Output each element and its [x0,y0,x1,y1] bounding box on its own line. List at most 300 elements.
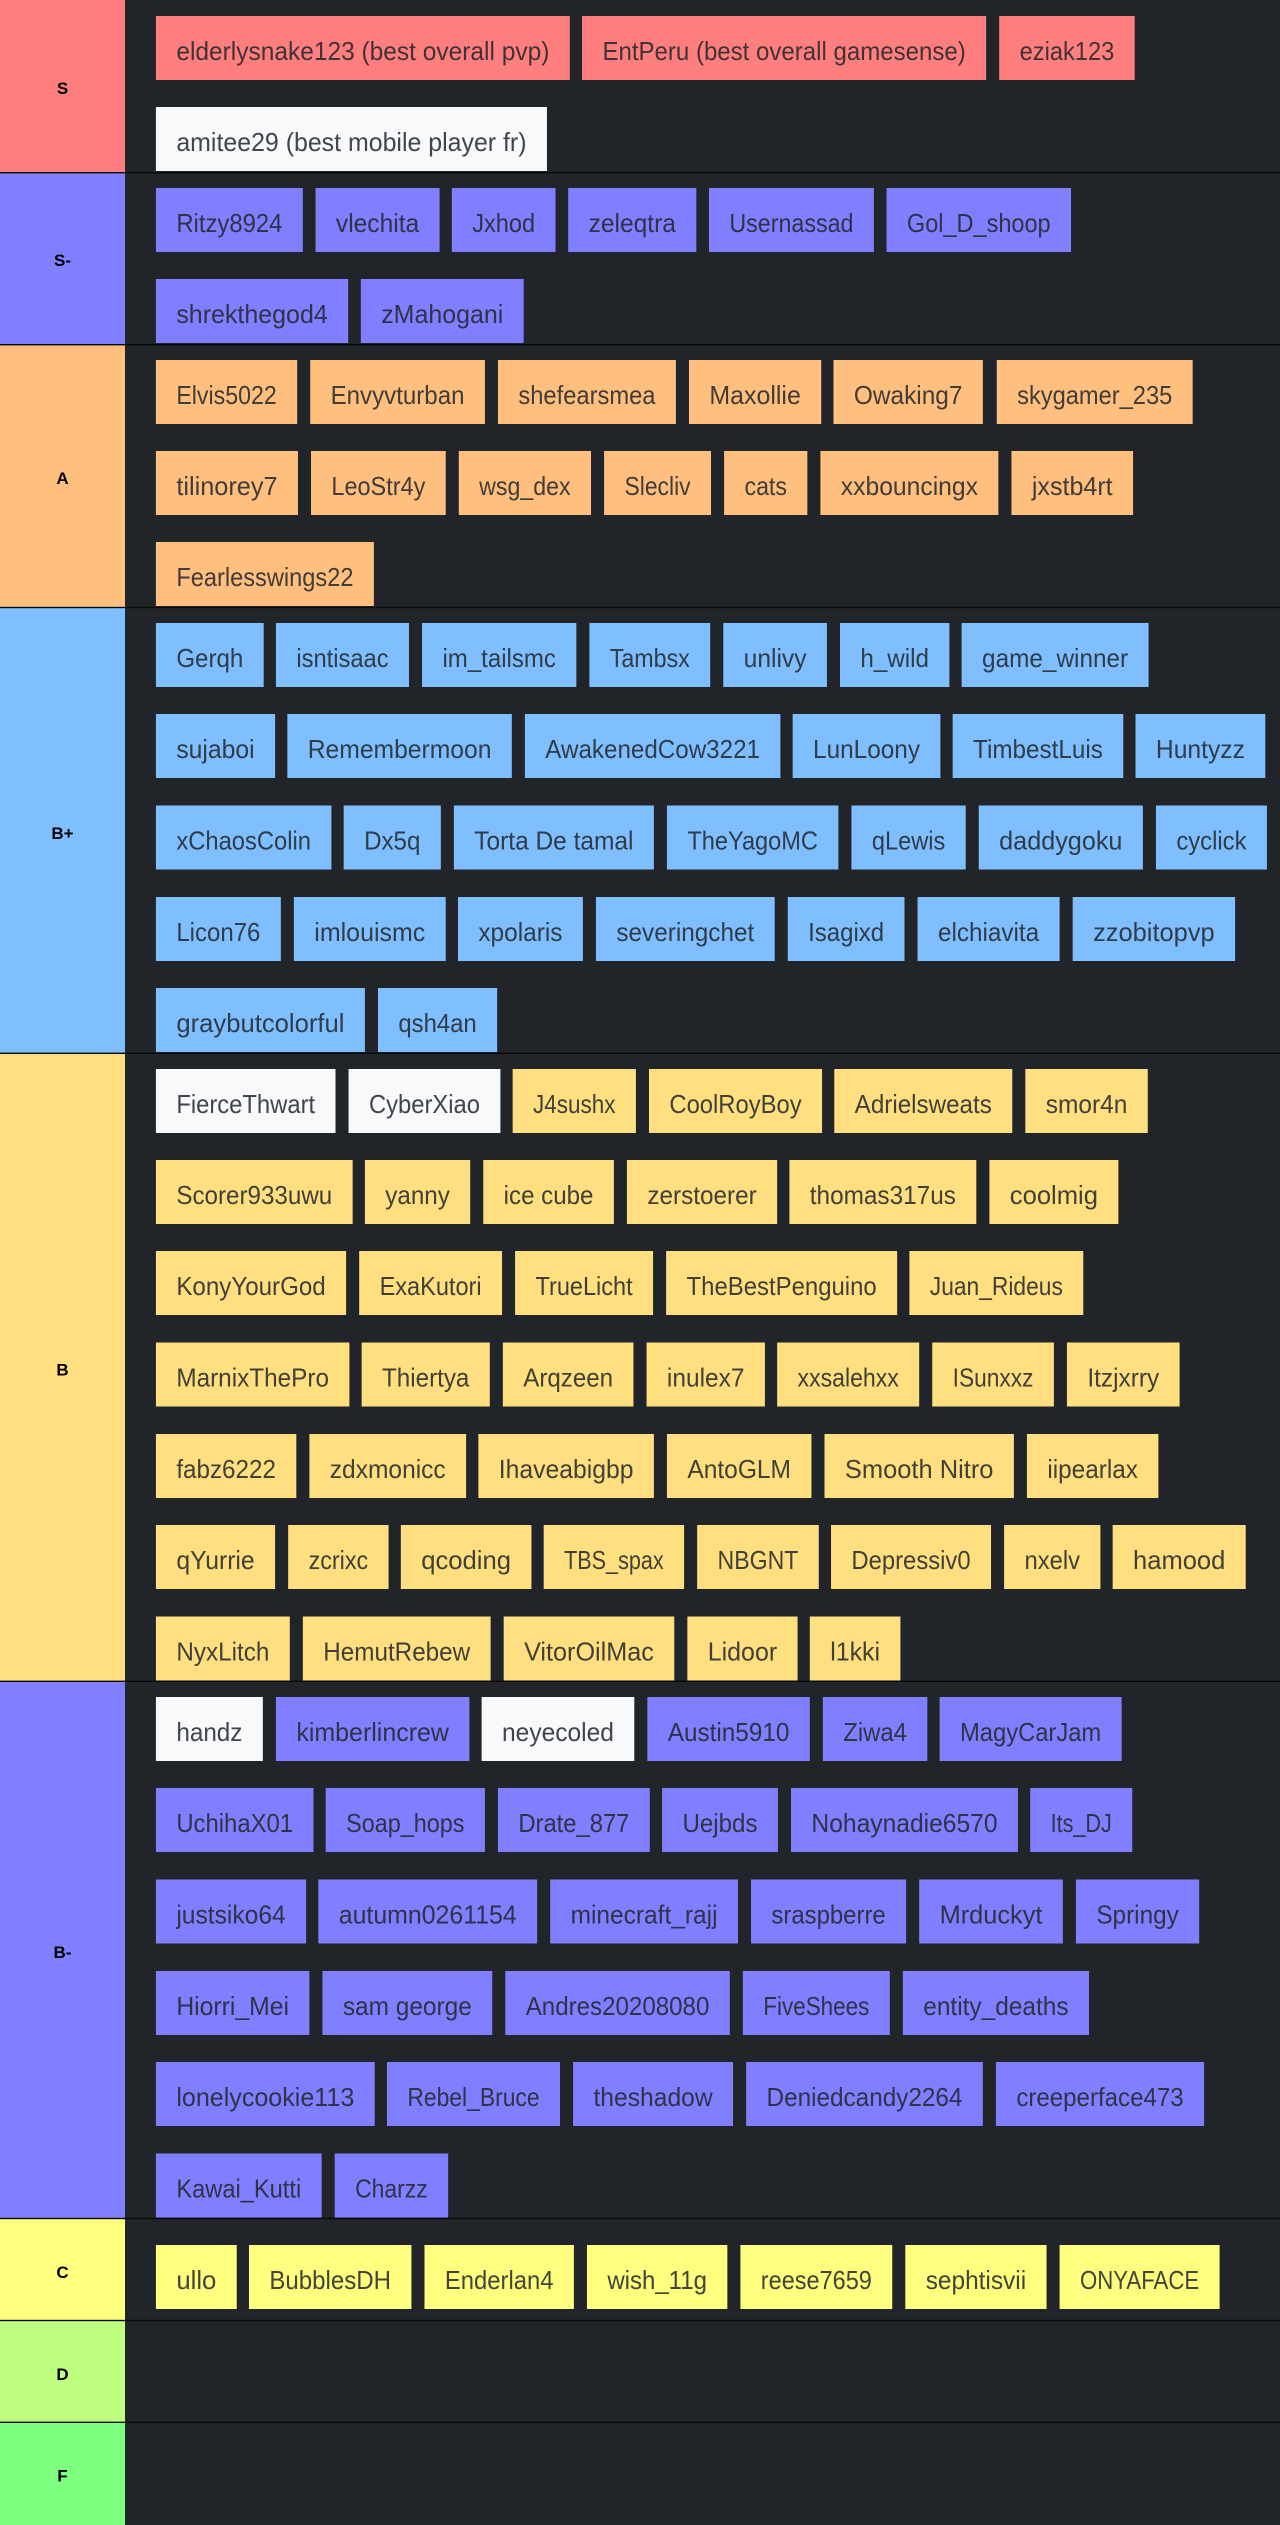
tier items: B+ [156,623,1267,1052]
tag: ExaKutori: ExaKutori [380,1273,482,1302]
tier label: D: D [56,2365,69,2384]
tag: Juan_Rideus [909,1251,1083,1315]
tag: ISunxxz: ISunxxz [953,1365,1033,1393]
tag: Arqzeen: Arqzeen [523,1365,613,1393]
tag: unlivy [723,623,827,687]
tag: reese7659: reese7659 [761,2267,872,2296]
tag: skygamer_235: skygamer_235 [1017,382,1172,411]
tag: Deniedcandy2264 [746,2062,983,2126]
tag: graybutcolorful [156,988,365,1052]
panel: tier B+ [0,608,1267,1053]
tag: Remembermoon [287,714,512,778]
tag: Andres20208080 [505,1971,730,2035]
tier items: C [156,2245,1220,2309]
tag: Envyvturban: Envyvturban [331,382,464,411]
tag: MarnixThePro [156,1342,349,1406]
tag: CyberXiao [349,1069,500,1133]
tag: ONYAFACE [1060,2245,1220,2309]
tag: isntisaac: isntisaac [296,645,389,674]
tag: neyecoled [482,1697,634,1761]
panel: tier D [0,2321,125,2422]
tag: Andres20208080: Andres20208080 [526,1993,709,2022]
tag: jxstb4rt: jxstb4rt [1031,473,1113,502]
tag: Torta De tamal [454,806,654,870]
tag: FierceThwart [156,1069,336,1133]
tag: zdxmonicc: zdxmonicc [330,1456,446,1485]
tag: TBS_spax [544,1525,684,1589]
tag: nxelv: nxelv [1024,1547,1080,1576]
tag: Owaking7 [833,360,983,424]
tag: coolmig: coolmig [1010,1182,1098,1211]
tag: qcoding: qcoding [421,1547,511,1576]
tag: Maxollie [689,360,821,424]
tag: h_wild [840,623,949,687]
tag: Hiorri_Mei [156,1971,309,2035]
tag: qLewis [851,806,966,870]
tier items: A [156,360,1193,606]
tag: J4sushx: J4sushx [533,1091,616,1120]
tag: xChaosColin: xChaosColin [176,828,311,856]
tag: zMahogani: zMahogani [381,301,503,330]
tier label: S [0,0,125,172]
tag: Adrielsweats [834,1069,1012,1133]
tag: Huntyzz: Huntyzz [1156,736,1245,765]
tag: sam george: sam george [343,1993,472,2022]
tag: Usernassad [709,188,874,252]
tag: Ihaveabigbp: Ihaveabigbp [499,1456,633,1485]
tag: creeperface473 [996,2062,1204,2126]
tag: theshadow: theshadow [593,2084,714,2113]
tag: severingchet: severingchet [616,919,755,948]
tag: Fearlesswings22 [156,542,374,606]
tag: Ritzy8924: Ritzy8924 [176,210,282,239]
tag: MagyCarJam [940,1697,1122,1761]
tag: Licon76: Licon76 [176,919,260,948]
tag: xxbouncingx [820,451,998,515]
tier items: S [156,16,1135,171]
tag: Kawai_Kutti [156,2154,322,2218]
tag: Adrielsweats: Adrielsweats [855,1091,992,1120]
tag: xpolaris: xpolaris [478,919,562,948]
tag: BubblesDH [249,2245,411,2309]
tag: TimbestLuis [953,714,1123,778]
tag: AwakenedCow3221 [525,714,780,778]
tag: Owaking7: Owaking7 [854,382,962,411]
tag: Maxollie: Maxollie [709,382,801,411]
tag: ice cube: ice cube [504,1182,593,1211]
panel: tier A [0,345,1193,607]
tag: sujaboi: sujaboi [176,736,255,765]
tag: minecraft_rajj: minecraft_rajj [571,1902,718,1930]
tag: FiveShees: FiveShees [763,1993,869,2022]
tag: LeoStr4y [311,451,446,515]
tag: zeleqtra: zeleqtra [589,210,677,239]
tag: Gol_D_shoop: Gol_D_shoop [907,210,1051,239]
tag: inulex7 [647,1342,765,1406]
tag: qYurrie: qYurrie [176,1547,255,1576]
tag: TheYagoMC: TheYagoMC [687,828,818,856]
tag: Smooth Nitro: Smooth Nitro [845,1456,993,1485]
tag: Thiertya: Thiertya [382,1365,470,1393]
tag: smor4n: smor4n [1046,1091,1127,1120]
tag: zMahogani [361,279,524,343]
tag: Licon76 [156,897,281,961]
tag: h_wild: h_wild [860,645,929,674]
tag: kimberlincrew [276,1697,469,1761]
tag: Ritzy8924 [156,188,303,252]
tag: ONYAFACE: ONYAFACE [1080,2267,1199,2296]
tag: Gol_D_shoop [887,188,1071,252]
tag: unlivy: unlivy [744,645,807,674]
tag: vlechita [316,188,440,252]
tag: reese7659 [740,2245,892,2309]
tag: Nohaynadie6570: Nohaynadie6570 [811,1810,998,1839]
tier items: B [156,1069,1246,1680]
tag: Usernassad: Usernassad [729,210,853,239]
tag: zdxmonicc [309,1434,466,1498]
tag: qcoding [401,1525,531,1589]
tag: Springy [1076,1880,1199,1944]
tag: qLewis: qLewis [872,828,945,856]
tier label: S-: S- [54,251,71,270]
tag: autumn0261154: autumn0261154 [339,1902,517,1930]
tag: Tambsx: Tambsx [610,645,690,674]
tag: UchihaX01 [156,1788,313,1852]
tag: Enderlan4: Enderlan4 [445,2267,553,2296]
tag: Jxhod: Jxhod [472,210,535,239]
tag: wsg_dex [459,451,591,515]
tag: zcrixc: zcrixc [309,1547,368,1576]
tag: imlouismc: imlouismc [314,919,425,948]
tier label: A [0,345,125,607]
tag: game_winner: game_winner [982,645,1128,674]
tag: Its_DJ: Its_DJ [1051,1810,1112,1839]
tier label: B: B [56,1360,69,1380]
tag: LeoStr4y: LeoStr4y [331,473,425,502]
panel: tier B- [0,1682,1204,2218]
tag: TrueLicht: TrueLicht [536,1273,633,1302]
tag: Fearlesswings22: Fearlesswings22 [176,564,353,593]
tag: VitorOilMac: VitorOilMac [524,1639,654,1667]
tag: Itzjxrry: Itzjxrry [1087,1365,1159,1393]
tag: cats: cats [744,473,787,502]
tag: CyberXiao: CyberXiao [369,1091,480,1120]
tag: creeperface473: creeperface473 [1016,2084,1184,2113]
tag: NyxLitch [156,1616,290,1680]
tag: LunLoony: LunLoony [813,736,920,765]
tag: Austin5910 [647,1697,810,1761]
tier label: F: F [57,2466,68,2486]
tag: thomas317us: thomas317us [810,1182,956,1211]
tag: minecraft_rajj [550,1880,738,1944]
tag: xxbouncingx: xxbouncingx [841,473,978,502]
tag: wish_11g: wish_11g [606,2267,707,2296]
tag: qsh4an: qsh4an [398,1010,477,1039]
tag: BubblesDH: BubblesDH [269,2267,391,2296]
tag: HemutRebew: HemutRebew [323,1639,471,1667]
tag: inulex7: inulex7 [667,1365,744,1393]
tag: Hiorri_Mei: Hiorri_Mei [176,1993,289,2022]
tag: entity_deaths [903,1971,1089,2035]
tag: Isagixd [788,897,904,961]
tag: ullo: ullo [176,2267,216,2296]
tier label: B+ [0,608,125,1053]
tag: sraspberre [751,1880,906,1944]
tag: xxsalehxx [777,1342,919,1406]
tag: KonyYourGod [156,1251,346,1315]
tag: lonelycookie113: lonelycookie113 [176,2084,354,2113]
tag: cats [724,451,807,515]
tag: xChaosColin [156,806,331,870]
tag: jxstb4rt [1011,451,1133,515]
tag: xpolaris [458,897,583,961]
panel: tier B [0,1054,1246,1681]
tag: l1kki [810,1616,900,1680]
tag: Mrduckyt [919,1880,1063,1944]
tag: LunLoony [793,714,940,778]
tag: im_tailsmc [422,623,576,687]
tag: Mrduckyt: Mrduckyt [940,1902,1043,1930]
tag: Drate_877 [498,1788,650,1852]
tag: cyclick [1156,806,1267,870]
tag: Lidoor: Lidoor [708,1639,777,1667]
tag: nxelv [1004,1525,1100,1589]
tag: imlouismc [294,897,446,961]
tag: Charzz: Charzz [355,2176,428,2204]
tag: Itzjxrry [1067,1342,1180,1406]
tag: ice cube [483,1160,614,1224]
tag: Scorer933uwu [156,1160,353,1224]
panel: tier S- [0,173,1071,344]
tag: CoolRoyBoy: CoolRoyBoy [669,1091,802,1120]
tag: thomas317us [789,1160,976,1224]
tag: Isagixd: Isagixd [808,919,884,948]
tier label: A: A [56,469,69,488]
tag: neyecoled: neyecoled [502,1719,614,1748]
tag: MarnixThePro: MarnixThePro [176,1365,329,1393]
tag: Uejbds [662,1788,778,1852]
tag: wsg_dex: wsg_dex [478,473,571,502]
tag: Its_DJ [1030,1788,1132,1852]
tag: Jxhod [452,188,556,252]
tag: Gerqh [156,623,264,687]
tag: EntPeru: EntPeru (best overall gamesense) [602,38,966,67]
tag: sam george [322,1971,492,2035]
tag: TheYagoMC [667,806,838,870]
tag: Envyvturban [310,360,485,424]
tier items: S- [156,188,1071,343]
tag: Ziwa4 [823,1697,927,1761]
tag: Torta De tamal: Torta De tamal [474,828,633,856]
tag: elchiavita [918,897,1060,961]
tag: Drate_877: Drate_877 [518,1810,629,1839]
tag: Gerqh: Gerqh [176,645,243,674]
tier label: B+: B+ [51,824,74,843]
tag: amitee29: amitee29 (best mobile player fr) [176,129,527,158]
tag: Deniedcandy2264: Deniedcandy2264 [767,2084,962,2113]
tag: autumn0261154 [318,1880,537,1944]
tag: Juan_Rideus: Juan_Rideus [930,1273,1063,1302]
tag: FiveShees [743,1971,890,2035]
tag: handz: handz [176,1719,242,1748]
tag: coolmig [989,1160,1118,1224]
tag: Dx5q: Dx5q [364,828,420,856]
tag: zzobitopvp: zzobitopvp [1093,919,1215,948]
tag: hamood [1113,1525,1246,1589]
tag: Enderlan4 [424,2245,574,2309]
tag: iipearlax [1027,1434,1158,1498]
tag: smor4n [1025,1069,1148,1133]
tag: graybutcolorful: graybutcolorful [176,1010,344,1039]
tag: qYurrie [156,1525,275,1589]
tag: Rebel_Bruce [387,2062,560,2126]
tag: fabz6222: fabz6222 [176,1456,276,1485]
tag: NyxLitch: NyxLitch [176,1639,269,1667]
tag: hamood: hamood [1133,1547,1225,1576]
tag: xxsalehxx: xxsalehxx [798,1365,899,1393]
tag: daddygoku: daddygoku [999,828,1122,856]
tier label: B [0,1054,125,1681]
tag: VitorOilMac [504,1616,674,1680]
tag: HemutRebew [303,1616,491,1680]
tier label: S- [0,173,125,344]
tag: yanny [365,1160,470,1224]
tag: sephtisvii: sephtisvii [926,2267,1026,2296]
panel: tier S [0,0,1135,172]
tag: yanny: yanny [385,1182,450,1211]
tag: Depressiv0: Depressiv0 [851,1547,971,1576]
tag: cyclick: cyclick [1176,828,1247,856]
tag: Rebel_Bruce: Rebel_Bruce [407,2084,540,2113]
tag: TBS_spax: TBS_spax [564,1547,664,1576]
tag: wish_11g [587,2245,727,2309]
tag: Ihaveabigbp [478,1434,654,1498]
tag: shefearsmea [498,360,676,424]
tier label: B- [0,1682,125,2218]
tag: TrueLicht [515,1251,653,1315]
tag: NBGNT: NBGNT [718,1547,798,1576]
tier items: B- [156,1697,1204,2218]
tag: TimbestLuis: TimbestLuis [973,736,1103,765]
tag: eziak123 [999,16,1135,80]
tag: KonyYourGod: KonyYourGod [176,1273,326,1302]
tag: Nohaynadie6570 [791,1788,1018,1852]
tag: vlechita: vlechita [336,210,420,239]
tag: ISunxxz [932,1342,1054,1406]
tag: Depressiv0 [831,1525,991,1589]
tag: zerstoerer: zerstoerer [647,1182,757,1211]
tag: Charzz [335,2154,448,2218]
tier label: S: S [57,79,68,98]
tag: skygamer_235 [997,360,1193,424]
tag: theshadow [573,2062,733,2126]
tag: J4sushx [513,1069,636,1133]
tag: zcrixc [288,1525,389,1589]
tag: qsh4an [378,988,497,1052]
tag: Tambsx [589,623,710,687]
tag: TheBestPenguino: TheBestPenguino [687,1273,877,1302]
tag: Slecliv [604,451,711,515]
tag: lonelycookie113 [156,2062,375,2126]
tag: UchihaX01: UchihaX01 [176,1810,293,1839]
tag: justsiko64: justsiko64 [175,1902,286,1930]
panel: tier F [0,2423,125,2525]
tag: justsiko64 [156,1880,306,1944]
tag: Uejbds: Uejbds [682,1810,758,1839]
tag: kimberlincrew: kimberlincrew [296,1719,450,1748]
tag: tilinorey7: tilinorey7 [176,473,278,502]
tier label: C: C [56,2263,69,2282]
tag: elderlysnake123 [156,16,570,80]
tier label: C [0,2219,125,2320]
tag: zzobitopvp [1073,897,1235,961]
tag: CoolRoyBoy [649,1069,822,1133]
tag: Springy: Springy [1096,1902,1179,1930]
tier label: B-: B- [54,1943,71,1962]
tag: Huntyzz [1136,714,1265,778]
tag: elderlysnake123: elderlysnake123 (best overall pvp) [176,38,549,67]
tag: MagyCarJam: MagyCarJam [960,1719,1101,1748]
tag: isntisaac [276,623,409,687]
tag: severingchet [596,897,775,961]
tag: Soap_hops: Soap_hops [346,1810,464,1839]
tag: shefearsmea: shefearsmea [518,382,656,411]
tag: eziak123: eziak123 [1020,38,1114,67]
tag: shrekthegod4: shrekthegod4 [176,301,328,330]
tag: AntoGLM: AntoGLM [687,1456,791,1485]
tag: ExaKutori [359,1251,502,1315]
tag: Elvis5022: Elvis5022 [176,382,277,411]
panel: tier C [0,2219,1220,2320]
tag: Smooth Nitro [824,1434,1014,1498]
tag: sujaboi [156,714,275,778]
tag: game_winner [962,623,1149,687]
tag: AwakenedCow3221: AwakenedCow3221 [545,736,760,765]
tag: daddygoku [979,806,1143,870]
tag: iipearlax: iipearlax [1047,1456,1138,1485]
tag: shrekthegod4 [156,279,348,343]
tag: Kawai_Kutti: Kawai_Kutti [176,2176,301,2204]
tag: zerstoerer [627,1160,777,1224]
tag: Remembermoon: Remembermoon [308,736,491,765]
tag: ullo [156,2245,237,2309]
tag: fabz6222 [156,1434,296,1498]
tag: zeleqtra [568,188,696,252]
tag: Dx5q [344,806,441,870]
tag: Soap_hops [326,1788,485,1852]
tag: Arqzeen [503,1342,633,1406]
tag: TheBestPenguino [666,1251,897,1315]
tag: Thiertya [362,1342,490,1406]
tag: im_tailsmc: im_tailsmc [442,645,556,674]
tag: sraspberre: sraspberre [771,1902,886,1930]
tag: amitee29 [156,107,547,171]
tag: Elvis5022 [156,360,297,424]
tag: NBGNT [697,1525,819,1589]
tag: Scorer933uwu: Scorer933uwu [176,1182,332,1211]
tag: handz [156,1697,263,1761]
tag: tilinorey7 [156,451,298,515]
tag: Slecliv: Slecliv [624,473,691,502]
tag: l1kki: l1kki [830,1639,880,1667]
tag: EntPeru [582,16,986,80]
tag: AntoGLM [667,1434,811,1498]
tag: Austin5910: Austin5910 [668,1719,789,1748]
tag: sephtisvii [905,2245,1047,2309]
tag: elchiavita: elchiavita [938,919,1040,948]
tag: FierceThwart: FierceThwart [176,1091,316,1120]
tag: Ziwa4: Ziwa4 [843,1719,907,1748]
